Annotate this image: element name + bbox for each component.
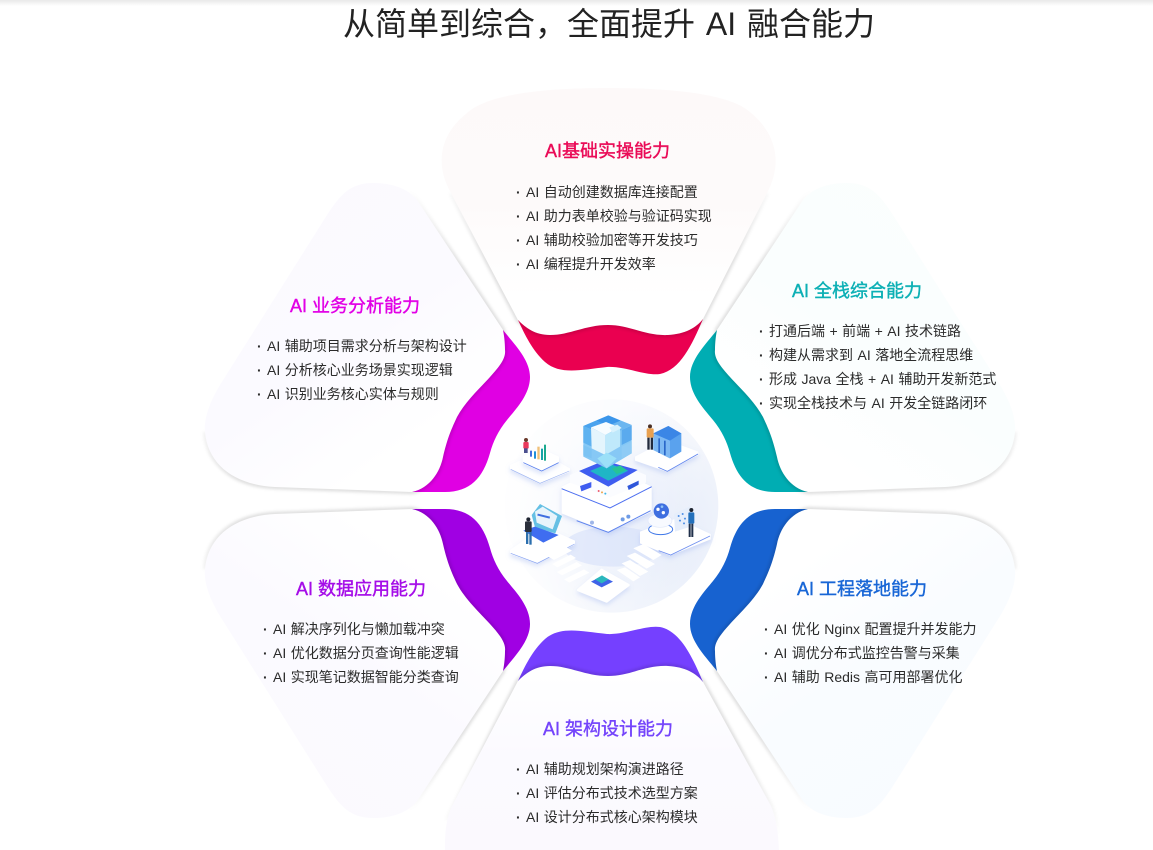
- panel: AI 工程落地能力: [690, 509, 1015, 818]
- list: ·: [764, 645, 769, 661]
- list: ·: [263, 645, 268, 661]
- petal background: [445, 666, 779, 850]
- list: [516, 761, 698, 825]
- list: ·: [759, 323, 764, 339]
- list: 构建从需求到 AI 落地全流程思维: [769, 347, 973, 363]
- list: [516, 184, 712, 272]
- list: AI 辅助校验加密等开发技巧: [526, 232, 698, 248]
- list: ·: [263, 669, 268, 685]
- panel: AI 业务分析能力: [205, 183, 530, 492]
- panel: AI 全栈综合能力: [690, 183, 1015, 492]
- list: ·: [516, 184, 521, 200]
- list: ·: [516, 256, 521, 272]
- list: ·: [764, 621, 769, 637]
- petal background: [442, 88, 776, 335]
- list: AI 评估分布式技术选型方案: [526, 785, 698, 801]
- petal background: [205, 509, 505, 818]
- bottom chip tile: [578, 570, 628, 601]
- heading: AI 数据应用能力: [296, 579, 426, 599]
- list: AI 设计分布式核心架构模块: [526, 809, 698, 825]
- list: AI 优化数据分页查询性能逻辑: [273, 645, 459, 661]
- platform: lower-left laptop: [510, 504, 575, 563]
- blue accent shape: [690, 509, 808, 671]
- pale disc: [505, 399, 719, 613]
- list: 形成 Java 全栈 + AI 辅助开发新范式: [769, 371, 996, 387]
- petal background: [715, 183, 1015, 492]
- heading: AI基础实操能力: [545, 141, 670, 161]
- platform: lower-right data cylinder: [640, 503, 711, 556]
- heading: AI 业务分析能力: [290, 296, 420, 316]
- list: ·: [516, 761, 521, 777]
- steps: [548, 544, 662, 583]
- top shadow band: [0, 0, 1153, 6]
- purple accent shape: [412, 509, 530, 671]
- list: AI 识别业务核心实体与规则: [267, 386, 439, 402]
- petal edge shadow: [447, 666, 778, 846]
- platform: top-left chart: [510, 438, 570, 484]
- panel: AI 数据应用能力: [205, 509, 530, 818]
- list: AI 助力表单校验与验证码实现: [526, 208, 712, 224]
- list: AI 辅助规划架构演进路径: [526, 761, 684, 777]
- list: [263, 621, 459, 685]
- magenta accent shape: [412, 330, 530, 492]
- petal edge shadow: [715, 183, 1015, 492]
- red accent shape: [518, 319, 703, 374]
- list: AI 辅助 Redis 高可用部署优化: [774, 669, 962, 685]
- glow under core: [563, 527, 663, 567]
- list: AI 分析核心业务场景实现逻辑: [267, 362, 453, 378]
- petal edge shadow: [715, 509, 1015, 818]
- list: AI 优化 Nginx 配置提升并发能力: [774, 621, 976, 637]
- list: 实现全栈技术与 AI 开发全链路闭环: [769, 395, 987, 411]
- petal edge shadow: [205, 509, 505, 818]
- teal accent shape: [690, 330, 808, 492]
- panel: AI 架构设计能力: [445, 627, 779, 850]
- list: AI 自动创建数据库连接配置: [526, 184, 698, 200]
- petal edge shadow: [451, 193, 767, 335]
- list: ·: [516, 785, 521, 801]
- list: AI 实现笔记数据智能分类查询: [273, 669, 459, 685]
- list: [257, 338, 467, 402]
- platform: top-right server: [635, 424, 698, 472]
- list: ·: [516, 232, 521, 248]
- list: ·: [263, 621, 268, 637]
- list: ·: [516, 809, 521, 825]
- list: ·: [257, 386, 262, 402]
- list: ·: [764, 669, 769, 685]
- list: AI 解决序列化与懒加载冲突: [273, 621, 445, 637]
- violet accent shape: [518, 627, 703, 682]
- petal edge shadow: [205, 183, 505, 492]
- petal background: [205, 183, 505, 492]
- list: AI 辅助项目需求分析与架构设计: [267, 338, 467, 354]
- heading: AI 全栈综合能力: [792, 281, 922, 301]
- list: ·: [759, 371, 764, 387]
- panel: AI基础实操能力: [442, 88, 776, 374]
- list: ·: [257, 338, 262, 354]
- list: AI 调优分布式监控告警与采集: [774, 645, 960, 661]
- heading: AI 工程落地能力: [797, 579, 927, 599]
- heading: AI 架构设计能力: [543, 719, 673, 739]
- list: [759, 323, 996, 411]
- list: 打通后端 + 前端 + AI 技术链路: [769, 323, 961, 339]
- list: AI 编程提升开发效率: [526, 256, 656, 272]
- central isometric illustration: [505, 399, 719, 613]
- list: ·: [516, 208, 521, 224]
- list: ·: [759, 347, 764, 363]
- list: [764, 621, 976, 685]
- list: ·: [759, 395, 764, 411]
- glowing cube: [583, 415, 632, 468]
- central platform with cube: [562, 458, 652, 532]
- title: 从简单到综合，全面提升 AI 融合能力: [343, 6, 875, 42]
- list: ·: [257, 362, 262, 378]
- petal background: [715, 509, 1015, 818]
